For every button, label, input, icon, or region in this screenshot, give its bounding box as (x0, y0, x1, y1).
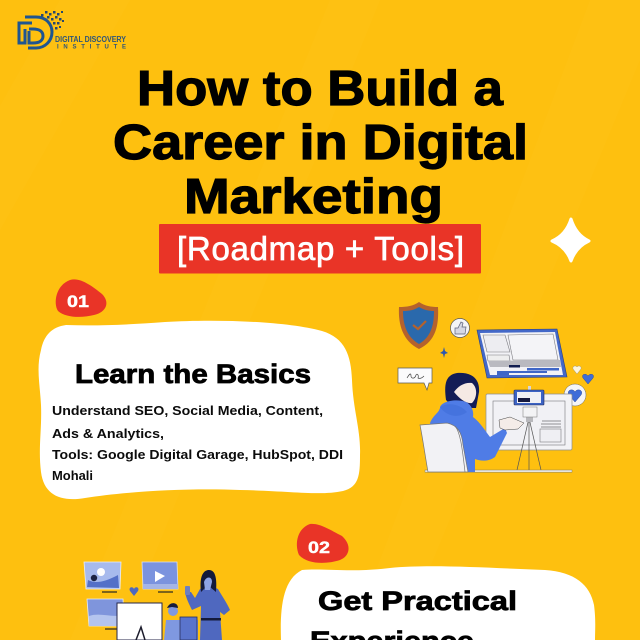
title: Career in Digital (113, 116, 528, 170)
panel: learn the basics (39, 321, 360, 499)
computer monitor (117, 603, 162, 640)
icon: shield (399, 302, 438, 349)
hearts (564, 366, 593, 406)
person (430, 373, 524, 472)
body text: Understand SEO, Social Media, Content, (52, 403, 323, 418)
heart and captions (102, 587, 173, 629)
logo: Digital Discovery Institute (19, 11, 127, 50)
logo sub-wordmark: INSTITUTE (57, 44, 126, 50)
camera tripod (514, 386, 544, 470)
icon: white sparkle (552, 219, 589, 261)
heading: Learn the Basics (75, 359, 311, 389)
title: Marketing (184, 170, 443, 224)
tablet screen (477, 329, 567, 378)
body text: Tools: Google Digital Garage, HubSpot, DDI (52, 447, 343, 462)
body text: Mohali (52, 468, 93, 483)
chair (420, 423, 468, 472)
title (113, 62, 528, 224)
seated man (164, 603, 198, 640)
speech bubble (398, 368, 432, 390)
subtitle banner (159, 224, 481, 274)
logo pixels (41, 11, 64, 30)
icon: small sparkle (440, 347, 448, 358)
title: How to Build a (137, 62, 504, 116)
body text: Ads & Analytics, (52, 426, 164, 441)
subtitle banner: [Roadmap + Tools] (177, 230, 464, 267)
step 2 number badge (297, 524, 349, 563)
step 2 number badge: 02 (308, 539, 330, 557)
logo mark (19, 17, 52, 48)
step 1 number badge (56, 279, 106, 317)
image card: swimmer (84, 562, 121, 589)
standing woman (185, 570, 230, 640)
illustration: team creating media (84, 562, 230, 640)
body text (52, 403, 343, 483)
step 1 number badge: 01 (67, 293, 89, 311)
video card (142, 562, 178, 589)
icon: thumbs up (450, 318, 470, 338)
panel: get practical experience (281, 566, 595, 640)
logo wordmark: DIGITAL DISCOVERY (55, 35, 127, 44)
desktop monitor (486, 394, 572, 450)
desk (425, 470, 572, 472)
heading: Get Practical (318, 586, 517, 616)
illustration: creator at desk (398, 302, 593, 472)
image card: night landscape (87, 599, 124, 626)
